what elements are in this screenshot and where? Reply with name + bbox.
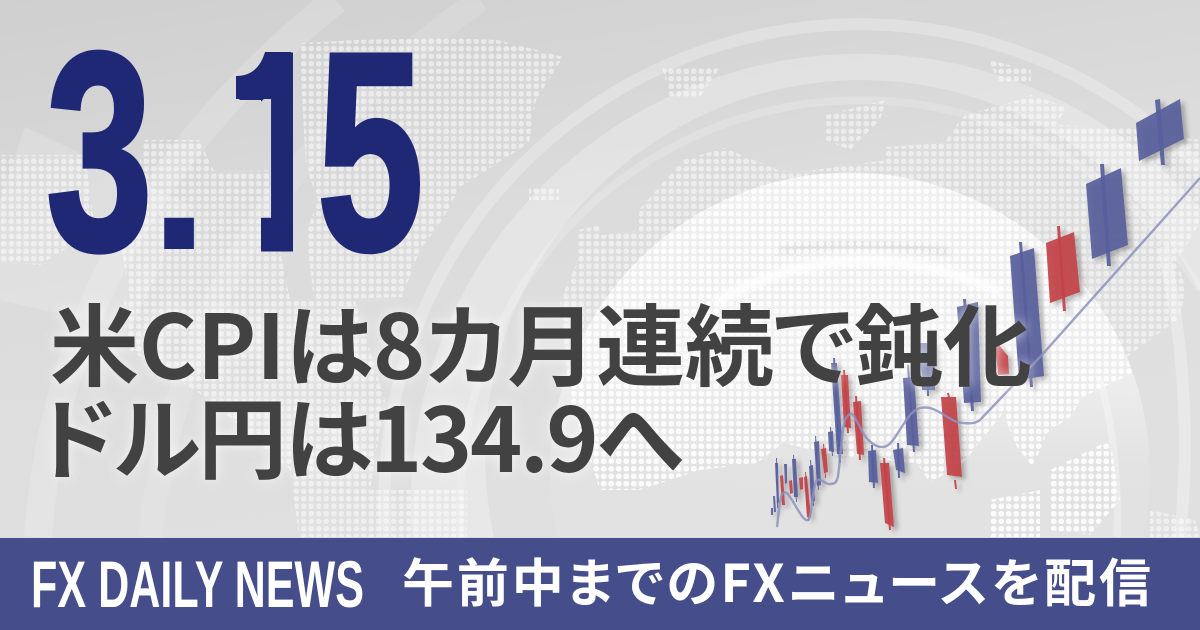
candlestick chart xyxy=(771,99,1184,530)
globe highlight xyxy=(558,172,1145,537)
headline line 1: 米CPIは8カ月連続で鈍化 xyxy=(50,276,1032,405)
red candles xyxy=(780,226,1080,530)
date: . xyxy=(150,59,208,294)
headline line 2: ドル円は134.9へ xyxy=(38,369,683,498)
date: 5 xyxy=(317,0,424,310)
footer brand label: FX DAILY NEWS xyxy=(31,547,364,621)
date: 1 xyxy=(228,0,335,310)
moving average line xyxy=(777,178,1200,527)
footer tagline: 午前中までのFXニュースを配信 xyxy=(402,542,1151,617)
blue candles xyxy=(771,99,1184,515)
footer band xyxy=(0,538,1200,630)
date: 3 xyxy=(46,0,153,310)
date xyxy=(48,50,420,255)
headline xyxy=(38,276,1032,498)
